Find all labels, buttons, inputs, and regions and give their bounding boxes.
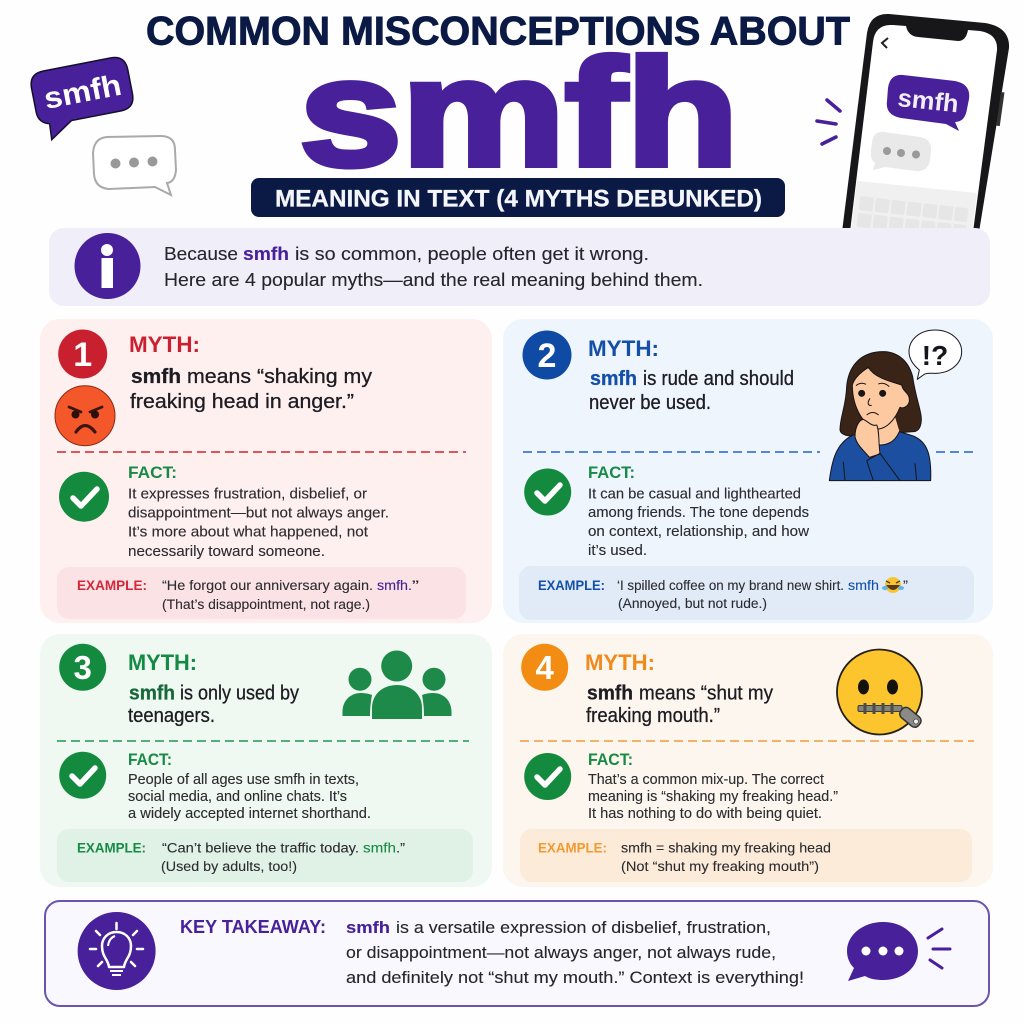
fact text: It expresses frustration, disbelief, or <box>128 486 367 502</box>
myth statement: smfh <box>129 682 175 704</box>
fact text: necessarily toward someone. <box>128 544 325 560</box>
fact text: on context, relationship, and how <box>588 524 810 540</box>
myth statement: is rude and should <box>643 368 794 390</box>
example box: EXAMPLE: <box>538 840 607 856</box>
intro text: Here are 4 popular myths—and the real meaning behind them. <box>164 270 703 290</box>
panel: key takeaway <box>45 901 989 1006</box>
myth heading: MYTH: <box>128 650 197 675</box>
bubble mark: !? <box>922 340 948 371</box>
takeaway text: is a versatile expression of disbelief, frustration, <box>396 918 771 937</box>
myth statement: never be used. <box>589 392 711 414</box>
fact text: It’s more about what happened, not <box>128 525 368 541</box>
takeaway text: smfh <box>346 918 390 937</box>
number badge 3: 3 <box>74 649 92 686</box>
example box: (Not “shut my freaking mouth”) <box>621 859 819 874</box>
myth statement: freaking mouth.” <box>586 705 720 727</box>
myth statement: freaking head in anger.” <box>130 391 354 413</box>
myth statement: means “shut my <box>639 682 773 704</box>
panel: myth 3 <box>40 634 492 887</box>
example box: ” <box>412 578 419 593</box>
example box: (That’s disappointment, not rage.) <box>162 597 370 612</box>
fact heading: FACT: <box>128 750 172 769</box>
fact text: That’s a common mix-up. The correct <box>588 772 824 788</box>
example box: “He forgot our anniversary again. <box>162 578 373 593</box>
example box: .” <box>396 841 405 856</box>
fact text <box>588 486 810 559</box>
example box: (Used by adults, too!) <box>161 859 297 874</box>
fact text: It has nothing to do with being quiet. <box>588 806 822 822</box>
icon: smartphone <box>842 14 1009 239</box>
intro text <box>164 244 703 290</box>
fact text: It can be casual and lighthearted <box>588 486 801 502</box>
fact text: disappointment—but not always anger. <box>128 506 389 522</box>
icon: purple smfh speech bubble: smfh <box>41 69 124 116</box>
fact text <box>588 772 838 822</box>
example box <box>519 566 974 620</box>
intro text: is so common, people often get it wrong. <box>295 244 649 264</box>
fact text: meaning is “shaking my freaking head.” <box>588 789 838 805</box>
example box: EXAMPLE: <box>77 577 147 593</box>
number badge 3 <box>59 644 106 691</box>
example box: smfh = shaking my freaking head <box>621 841 831 856</box>
number badge 1 <box>58 330 107 378</box>
example box: ‘I spilled coffee on my brand new shirt. <box>617 578 844 593</box>
panel: myth 4 <box>503 634 993 887</box>
icon: light bulb <box>78 912 156 990</box>
intro text: Because <box>164 244 238 264</box>
fact text: People of all ages use smfh in texts, <box>128 772 359 788</box>
myth statement: smfh <box>590 368 637 390</box>
icon: check mark <box>59 752 106 799</box>
example box: EXAMPLE: <box>538 577 605 593</box>
example box: smfh <box>363 841 396 856</box>
icon: chat bubble with rays <box>847 922 950 981</box>
myth statement <box>586 682 773 727</box>
myth heading: MYTH: <box>585 650 655 675</box>
takeaway heading: KEY TAKEAWAY: <box>180 917 326 937</box>
icon: group of people <box>342 650 452 719</box>
icon: check mark <box>524 753 571 800</box>
fact text <box>128 772 371 822</box>
example box <box>57 829 473 882</box>
icon: info <box>74 233 140 299</box>
myth statement <box>130 366 372 413</box>
example box: smfh <box>848 578 879 593</box>
icon: smartphone: smfh <box>896 84 960 118</box>
myth statement: teenagers. <box>128 705 215 727</box>
fact text: among friends. The tone depends <box>588 505 809 521</box>
big word: smfh: smfh <box>300 28 738 198</box>
panel: myth 2 <box>503 319 993 623</box>
fact text: a widely accepted internet shorthand. <box>128 806 371 822</box>
example box: (Annoyed, but not rude.) <box>618 596 767 611</box>
example box: ” <box>903 578 908 593</box>
title: COMMON MISCONCEPTIONS ABOUT <box>146 10 850 54</box>
number badge 4 <box>521 644 568 691</box>
icon: purple smfh speech bubble <box>29 55 138 142</box>
example box <box>520 829 972 882</box>
subtitle badge <box>251 178 785 217</box>
example box: EXAMPLE: <box>77 840 146 856</box>
fact heading: FACT: <box>128 463 177 482</box>
icon: angry face <box>55 386 115 446</box>
myth statement <box>128 682 299 727</box>
takeaway text: and definitely not “shut my mouth.” Context is everything! <box>346 968 804 987</box>
myth statement: smfh <box>587 682 633 704</box>
icon: grey typing bubble <box>93 136 176 195</box>
example box: “Can’t believe the traffic today. <box>162 841 359 856</box>
panel: intro band <box>49 228 990 306</box>
myth heading: MYTH: <box>129 332 200 357</box>
number badge 1: 1 <box>73 336 92 374</box>
example box <box>57 567 466 619</box>
fact text <box>128 486 389 560</box>
takeaway text <box>346 918 804 987</box>
fact heading: FACT: <box>588 750 633 769</box>
fact heading: FACT: <box>588 463 635 482</box>
example box: smfh. <box>377 578 412 593</box>
myth statement: is only used by <box>180 682 299 704</box>
takeaway text: or disappointment—not always anger, not always rude, <box>346 943 776 962</box>
myth statement: smfh <box>131 366 181 388</box>
icon: emphasis rays beside phone <box>817 100 840 144</box>
icon: check mark <box>59 472 109 522</box>
number badge 2: 2 <box>538 337 556 375</box>
number badge 4: 4 <box>536 649 555 686</box>
icon: zipper-mouth face <box>837 650 923 734</box>
myth statement: means “shaking my <box>187 366 372 388</box>
illustration: confused woman <box>829 330 962 481</box>
icon: laughing emoji <box>882 577 904 593</box>
myth statement <box>589 368 794 414</box>
number badge 2 <box>522 330 572 380</box>
myth heading: MYTH: <box>588 336 659 361</box>
subtitle badge: MEANING IN TEXT (4 MYTHS DEBUNKED) <box>275 186 762 212</box>
icon: check mark <box>524 468 571 516</box>
intro text: smfh <box>243 244 289 264</box>
fact text: it’s used. <box>588 543 647 559</box>
panel: myth 1 <box>40 319 492 623</box>
fact text: social media, and online chats. It’s <box>128 789 347 805</box>
